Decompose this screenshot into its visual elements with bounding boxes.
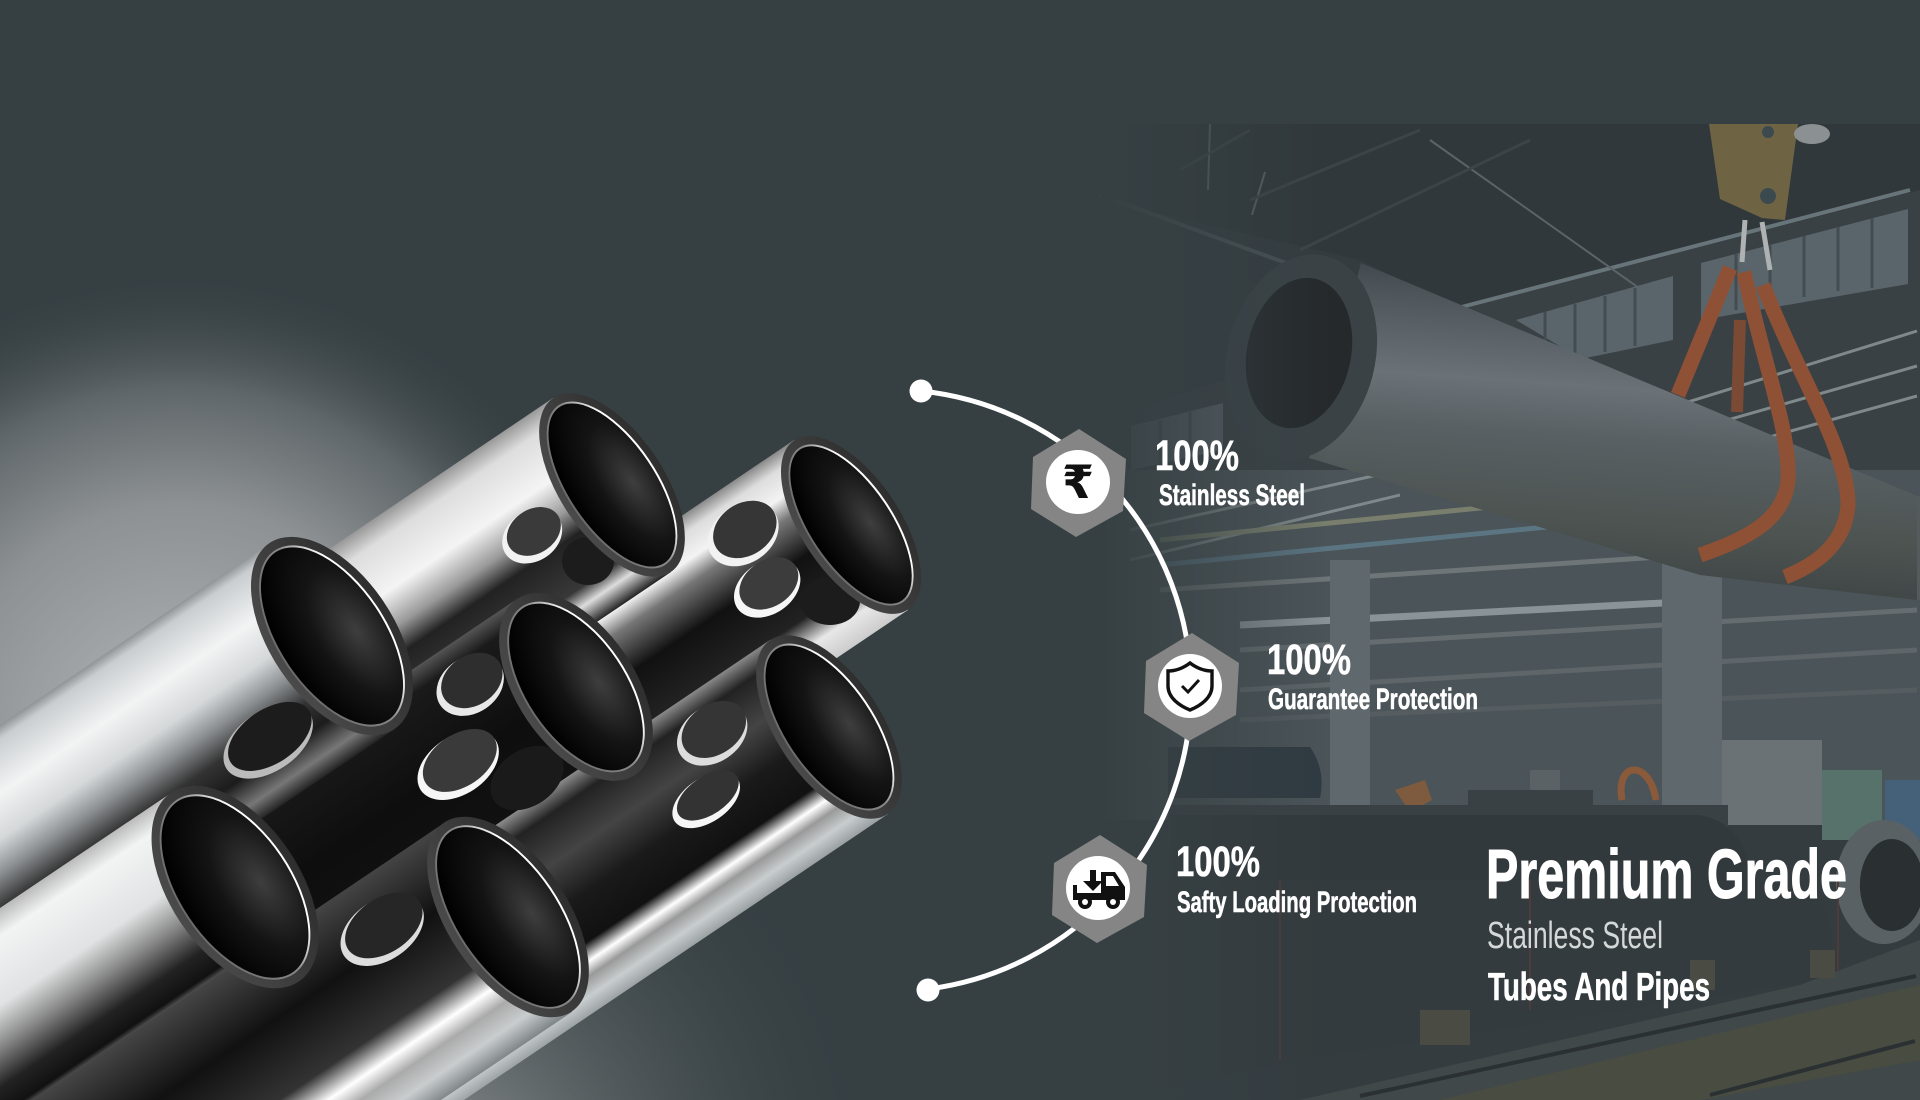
dark pipe stock (1100, 747, 1832, 1100)
pipes (1160, 500, 1917, 720)
tube mouth: right (727, 611, 931, 843)
wall upper band (1100, 190, 1920, 470)
subtitle: Stainless Steel (1487, 915, 1663, 957)
ceiling beams (1100, 124, 1910, 310)
icon: rupee in hexagon: ₹ (1062, 455, 1094, 509)
columns (1330, 555, 1722, 845)
ceiling (1100, 124, 1920, 330)
item: stainless steel (1031, 429, 1305, 537)
figure: 100% (1267, 636, 1351, 684)
icon: shield in hexagon (1144, 633, 1239, 741)
left fade (1100, 124, 1330, 1100)
tube mouth: top (510, 369, 714, 601)
tube mouth: top right (753, 413, 949, 637)
railings (1130, 331, 1917, 560)
tube mouth: lower (395, 789, 621, 1045)
tube mouth: centre (468, 566, 684, 808)
item: guarantee protection (1144, 633, 1478, 741)
steel tube bundle (0, 369, 949, 1100)
figure: 100% (1176, 838, 1260, 886)
item: safety loading (1052, 835, 1417, 943)
windows (1131, 209, 1908, 470)
curved connector arc (910, 380, 1191, 1002)
icon: rupee in hexagon (1031, 429, 1126, 537)
crane hook (1709, 124, 1830, 270)
stand legs (1280, 880, 1838, 1060)
reflections of tube mouths (210, 489, 860, 981)
floor (1300, 940, 1920, 1100)
factory photo panel (1100, 124, 1920, 1100)
label: Safty Loading Protection (1177, 886, 1417, 919)
label: Guarantee Protection (1268, 683, 1478, 716)
cut pipe at right (1836, 820, 1920, 944)
tube mouth: lower left (117, 756, 353, 1018)
label: Stainless Steel (1159, 479, 1305, 512)
figure: 100% (1155, 432, 1239, 480)
large hoisted tube (1204, 238, 1920, 600)
cabinets and machinery (1395, 740, 1920, 840)
icon: truck in hexagon (1052, 835, 1147, 943)
subtitle bold: Tubes And Pipes (1488, 966, 1710, 1009)
title block (1486, 835, 1847, 1009)
back wall (1100, 470, 1920, 820)
tube bodies (0, 398, 908, 1100)
tube mouth: left (218, 508, 446, 764)
orange straps (1678, 268, 1848, 577)
